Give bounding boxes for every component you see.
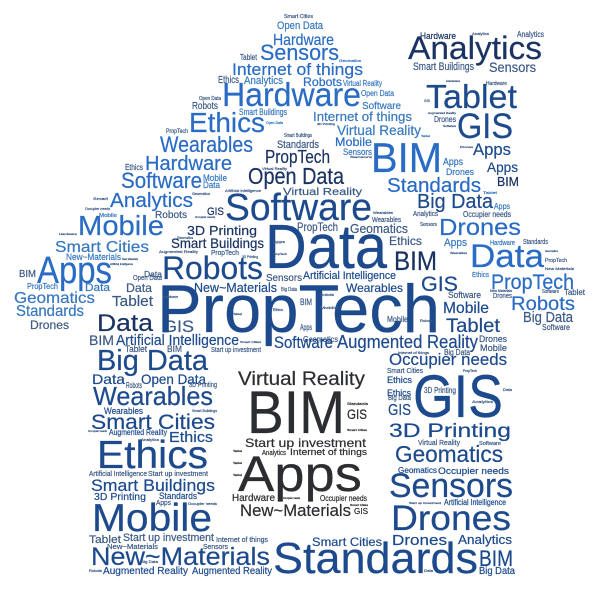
door words, dark grey: Smart Cities xyxy=(350,503,369,507)
chimney words: GIS xyxy=(424,98,430,103)
roof words: left slope: Virtual Reality xyxy=(262,166,287,171)
left eave words: Mobile xyxy=(99,213,117,219)
roof words: right slope: Tablet xyxy=(421,134,430,138)
left wall words: Big Data xyxy=(141,559,159,564)
left wall words: Wearables xyxy=(104,406,143,416)
right wall words: Geomatics xyxy=(395,441,503,467)
roof words: left slope: Mobile xyxy=(203,173,227,183)
centre band words: Tablet xyxy=(125,344,147,354)
centre band words: Wearables xyxy=(373,210,393,215)
centre band words xyxy=(89,187,511,354)
centre band words: Wearables xyxy=(372,217,401,224)
roof words: right slope: Big Data xyxy=(417,191,494,213)
right wall words: Artificial Intelligence xyxy=(444,498,506,507)
right eave words: Wearables xyxy=(450,251,468,255)
right wall words: Drones xyxy=(392,532,447,549)
word: Software: Software xyxy=(225,187,372,229)
left wall words: Data xyxy=(92,371,125,387)
door words, dark grey: Standards xyxy=(347,401,368,406)
centre band words: Smart Buildings xyxy=(171,235,264,251)
door words, dark grey: Occupier needs xyxy=(283,496,300,500)
word: PropTech, dominant: PropTech xyxy=(157,271,440,347)
centre band words: GIS xyxy=(207,206,224,218)
roof words: right slope: Virtual Reality xyxy=(343,79,382,88)
left wall words: Apps xyxy=(156,500,171,507)
right wall words: Geomatics xyxy=(398,466,437,475)
centre band words: GIS xyxy=(163,317,194,336)
centre band words: Apps xyxy=(273,239,285,244)
left wall words: New~Materials xyxy=(107,544,159,551)
centre band words: Sensors xyxy=(420,222,437,228)
roof words: left slope: Open Data xyxy=(266,120,284,125)
roof words: right slope: Geomatics xyxy=(339,58,361,63)
right wall words: 3D Printing xyxy=(424,386,456,395)
roof words: right slope: Sensors xyxy=(350,155,373,159)
centre band words: Apps xyxy=(300,323,312,332)
right wall words: Smart Cities xyxy=(312,535,382,549)
centre band words: Start up investment xyxy=(211,347,261,354)
left wall words: Occupier needs xyxy=(188,501,217,506)
left wall words: Start up investment xyxy=(148,471,208,478)
roof words: right slope: Mobile xyxy=(335,135,372,149)
right eave words: PropTech xyxy=(491,271,574,294)
right eave words xyxy=(439,214,586,332)
left eave words: Geomatics xyxy=(14,290,95,307)
word: Data, blue: Data xyxy=(470,238,544,274)
centre band words: New~Materials xyxy=(194,280,277,295)
word: Ethics: Ethics xyxy=(189,107,265,138)
word: Drones, large: Drones xyxy=(391,499,511,538)
word: Robots: Robots xyxy=(162,250,263,286)
right eave words: PropTech xyxy=(545,258,567,264)
centre band words: BIM xyxy=(89,332,114,348)
door words, dark grey: Start up investment xyxy=(245,436,367,450)
right wall words: PropTech xyxy=(463,368,477,373)
centre band words: GIS xyxy=(421,273,458,296)
roof words: right slope: Standards xyxy=(387,175,481,197)
centre band words: Data xyxy=(144,270,163,279)
centre band words: Artificial Intelligence xyxy=(116,332,239,349)
centre band words: BIM xyxy=(300,297,312,307)
roof words: left slope: Data xyxy=(203,180,220,190)
left wall words: Start up investment xyxy=(123,532,214,544)
right wall words: Virtual Reality xyxy=(418,440,460,447)
right eave words: Standards xyxy=(523,239,548,246)
left wall words: 3D Printing xyxy=(94,492,146,503)
word: Drones, blue: Drones xyxy=(439,214,521,240)
left wall words: Open Data xyxy=(141,371,206,387)
door words, dark grey: Tablet xyxy=(233,449,242,453)
left eave words xyxy=(14,210,164,332)
centre band words: Tablet xyxy=(233,312,242,316)
door words, dark grey: Smart Cities xyxy=(347,428,368,432)
centre band words: Tablet xyxy=(112,293,154,310)
left wall words: Artificial Intelligence xyxy=(89,471,147,478)
roof words: right slope: Sensors xyxy=(343,147,372,157)
left wall words: Standards xyxy=(159,491,197,501)
roof words: right slope: Robots xyxy=(303,75,342,89)
right wall words: Occupier needs xyxy=(389,350,507,369)
centre band words: Smart Cities xyxy=(240,340,262,344)
word: Ethics, large: Ethics xyxy=(97,434,208,477)
left wall words: New~Materials xyxy=(91,543,270,571)
roof words: left slope: Artificial Intelligence xyxy=(225,188,262,193)
left wall words: Ethics xyxy=(169,429,213,446)
roof words: right slope: 3D Printing xyxy=(317,122,335,126)
word: BIM, door: BIM xyxy=(247,379,345,446)
roof words: left slope: Open Data xyxy=(277,20,324,32)
right wall words: Software xyxy=(479,441,501,447)
roof words: left slope: Smart Cities xyxy=(284,14,314,20)
word: Standards, large: Standards xyxy=(273,534,478,583)
centre band words: Mobile xyxy=(443,300,489,317)
roof words: left slope: Occupier needs xyxy=(85,206,110,211)
roof words: left slope: Hardware xyxy=(145,153,232,175)
door words, dark grey: Occupier needs xyxy=(320,494,367,503)
centre band words: Augmented Reality xyxy=(159,249,198,254)
word: Tablet: Tablet xyxy=(426,78,517,115)
left eave words: New Materials xyxy=(122,257,138,261)
right wall words: Data xyxy=(424,568,434,573)
right wall words: Ethics xyxy=(387,375,413,385)
roof words: left slope: Software xyxy=(121,168,202,193)
centre band words: BIM xyxy=(394,246,437,276)
left wall words: Smart Cities xyxy=(91,411,215,434)
right eave words: Ethics xyxy=(472,272,489,279)
centre band words: Ethics xyxy=(273,307,283,312)
centre band words: Augmented Reality xyxy=(337,332,478,352)
roof words: right slope: Drones xyxy=(460,145,474,149)
left wall words: Robots xyxy=(126,381,142,390)
left eave words: Hardware xyxy=(59,232,77,236)
door words, dark grey: Tablet xyxy=(233,461,242,465)
roof words: left slope: Ethics xyxy=(125,163,143,172)
door words, dark grey: GIS xyxy=(354,507,368,516)
centre band words: Open Data xyxy=(133,275,162,282)
centre band words: Software xyxy=(274,333,333,352)
centre band words: Tablet xyxy=(446,316,501,337)
left wall words: Internet of things xyxy=(216,537,268,544)
right eave words: Hardware xyxy=(490,240,515,247)
left wall words: Occupier needs xyxy=(88,429,107,433)
centre band words: 3D Printing xyxy=(242,254,258,259)
chimney words: Sensors xyxy=(489,59,536,75)
left wall words: Smart Buildings xyxy=(192,408,217,413)
roof words: right slope: Internet of things xyxy=(313,109,413,124)
left wall words xyxy=(88,345,272,577)
roof words: left slope: Analytics xyxy=(110,190,193,212)
roof words: left slope: PropTech xyxy=(265,147,330,167)
left wall words: Tablet xyxy=(89,534,121,546)
roof words: left slope: Hardware xyxy=(273,32,334,49)
word: Data, largest: Data xyxy=(265,213,387,282)
left eave words: Data xyxy=(85,282,111,294)
right wall words: Analytics xyxy=(472,399,493,404)
centre band words: Sensors xyxy=(266,273,302,284)
roof words: left slope: Standards xyxy=(277,139,319,151)
centre band words: 3D Printing xyxy=(187,223,257,238)
roof words: left slope xyxy=(85,14,363,212)
centre band words: Big Data xyxy=(281,287,297,293)
word: Sensors, large: Sensors xyxy=(389,467,513,505)
right eave words: Robots xyxy=(511,294,575,315)
left wall words: Smart Buildings xyxy=(91,476,215,495)
centre band words: Wearables xyxy=(346,281,403,295)
roof words: right slope: Tablet xyxy=(483,190,498,195)
door words, dark grey: Analytics xyxy=(262,450,286,457)
roof words: left slope: Geomatics xyxy=(192,191,210,196)
door words, dark grey: Internet of things xyxy=(290,447,368,457)
roof words: right slope: Virtual Reality xyxy=(283,187,362,198)
word: Apps, blue: Apps xyxy=(37,250,112,292)
right eave words: Apps xyxy=(444,237,467,249)
roof words: left slope: Sensors xyxy=(260,40,339,65)
right wall words: Start up investment xyxy=(409,501,441,505)
right wall words: Occupier needs xyxy=(438,466,510,476)
centre band words: Mobile xyxy=(480,343,507,353)
left eave words: New~Materials xyxy=(66,252,121,262)
roof words: right slope: Apps xyxy=(473,140,511,159)
right eave words: Software xyxy=(542,289,559,295)
roof words: right slope: Drones xyxy=(446,167,474,177)
right wall words: Internet of things xyxy=(398,350,429,355)
left wall words: Robots xyxy=(89,568,102,573)
left eave words: Drones xyxy=(30,318,69,332)
left eave words: Mobile xyxy=(78,210,164,241)
chimney words: Smart Buildings xyxy=(413,61,474,73)
roof words: right slope xyxy=(283,58,519,213)
right wall words: Analytics xyxy=(458,532,513,547)
right wall words: Big Data xyxy=(444,348,470,357)
word: Apps, door: Apps xyxy=(238,446,362,502)
left wall words: Analytics xyxy=(141,437,159,442)
left wall words: Augmented Reality xyxy=(192,566,272,577)
left eave words: BIM xyxy=(19,269,36,280)
chimney words: Hardware xyxy=(446,79,460,83)
right wall words: BIM xyxy=(479,546,513,571)
right eave words: Tablet xyxy=(564,288,586,297)
right wall words: Data xyxy=(503,387,513,392)
word: GIS, large: GIS xyxy=(413,363,503,430)
word: Hardware: Hardware xyxy=(222,76,361,113)
door words, dark grey: Tablet xyxy=(233,473,242,477)
word: GIS: GIS xyxy=(457,107,513,146)
left eave words: Standards xyxy=(16,303,84,320)
roof words: right slope: Virtual Reality xyxy=(337,122,421,138)
right wall words: Ethics xyxy=(387,388,411,398)
word: BIM, blue: BIM xyxy=(371,134,442,181)
roof words: left slope: Smart Buildings xyxy=(284,133,312,139)
word: Analytics: Analytics xyxy=(408,30,542,66)
roof words: left slope: Robots xyxy=(192,101,218,112)
centre band words: BIM xyxy=(167,344,182,354)
centre band words: Occupier needs xyxy=(463,210,511,219)
centre band words: Occupier needs xyxy=(195,215,215,219)
roof words: left slope: Tablet xyxy=(240,53,258,62)
left wall words: Sensors xyxy=(203,544,228,551)
centre band words: Mobile xyxy=(387,315,408,324)
centre band words: Robots xyxy=(155,210,187,221)
centre band words: Analytics xyxy=(413,211,438,218)
right wall words: GIS xyxy=(388,402,411,419)
left wall words: Augmented Reality xyxy=(103,566,188,577)
left wall words: 3D Printing xyxy=(189,382,217,389)
right eave words: Geomatics xyxy=(545,249,558,253)
centre band words: Geomatics xyxy=(303,335,338,344)
roof words: left slope: Smart xyxy=(93,196,109,201)
roof words: left slope: Wearables xyxy=(160,132,253,157)
right eave words: Drones xyxy=(493,293,512,300)
centre band words: PropTech xyxy=(273,252,287,256)
roof words: left slope: Open Data xyxy=(248,163,344,189)
centre band words: Drones xyxy=(479,334,507,344)
centre band words: Mobile xyxy=(320,305,339,310)
centre band words: Robots xyxy=(320,292,334,297)
centre band words: Robots xyxy=(420,318,433,323)
word: Big Data: Big Data xyxy=(97,345,209,377)
right wall words: Big Data xyxy=(388,395,411,402)
centre band words: Hardware xyxy=(163,294,179,299)
roof words: left slope: Open Data xyxy=(199,96,221,102)
left eave words: Artificial Intelligence xyxy=(110,262,133,266)
left eave words: PropTech xyxy=(27,282,58,291)
door words, dark grey: GIS xyxy=(347,406,367,422)
roof words: left slope: Ethics xyxy=(218,75,239,86)
left wall words: Wearables xyxy=(93,381,213,411)
right wall words xyxy=(273,348,515,583)
right wall words: 3D Printing xyxy=(389,421,511,442)
roof words: right slope: Apps xyxy=(443,157,463,168)
roof words: right slope: Open Data xyxy=(361,89,394,98)
chimney words: Drones xyxy=(434,115,456,124)
door words, dark grey: Hardware xyxy=(232,493,275,504)
centre band words: Software xyxy=(448,290,481,300)
centre band words: PropTech xyxy=(297,220,338,234)
left eave words: Smart Cities xyxy=(55,239,149,256)
right eave words: Big Data xyxy=(523,309,574,326)
centre band words: Ethics xyxy=(389,234,422,248)
door words, dark grey xyxy=(232,369,369,520)
chimney words: Hardware xyxy=(420,31,456,41)
roof words: left slope: PropTech xyxy=(166,129,188,135)
right wall words: Smart Cities xyxy=(387,368,423,375)
chimney words: Analytics xyxy=(517,30,544,39)
word: Mobile, large: Mobile xyxy=(92,497,212,540)
roof words: right slope: BIM xyxy=(497,174,519,189)
door words, dark grey: Virtual Reality xyxy=(238,369,366,390)
right eave words: New Materials xyxy=(545,266,574,271)
roof words: left slope: Internet of things xyxy=(232,60,363,79)
centre band words: Geomatics xyxy=(350,221,408,236)
chimney words: Software xyxy=(443,124,456,128)
roof words: left slope: Smart Buildings xyxy=(239,107,287,117)
chimney words xyxy=(408,30,544,146)
centre band words: Artificial Intelligence xyxy=(303,270,396,282)
chimney words: Hardware xyxy=(486,81,507,87)
left wall words: Augmented Reality xyxy=(109,428,167,437)
centre band words: PropTech xyxy=(211,250,239,257)
right eave words: Software xyxy=(542,323,570,332)
centre band words: Data xyxy=(126,281,152,295)
roof words: left slope: Analytics xyxy=(244,75,283,87)
right eave words: New Materials xyxy=(490,288,512,293)
chimney words: Analytics xyxy=(472,31,489,36)
chimney words: Augmented Reality xyxy=(428,111,457,115)
roof words: right slope: Apps xyxy=(494,202,510,211)
centre band words: Geomatics xyxy=(177,235,193,240)
roof words: right slope: Apps xyxy=(487,159,518,175)
door words, dark grey: New~Materials xyxy=(240,501,351,520)
right wall words: Big Data xyxy=(479,566,515,577)
centre band words: Data xyxy=(97,310,154,337)
roof words: right slope: Software xyxy=(362,101,401,112)
